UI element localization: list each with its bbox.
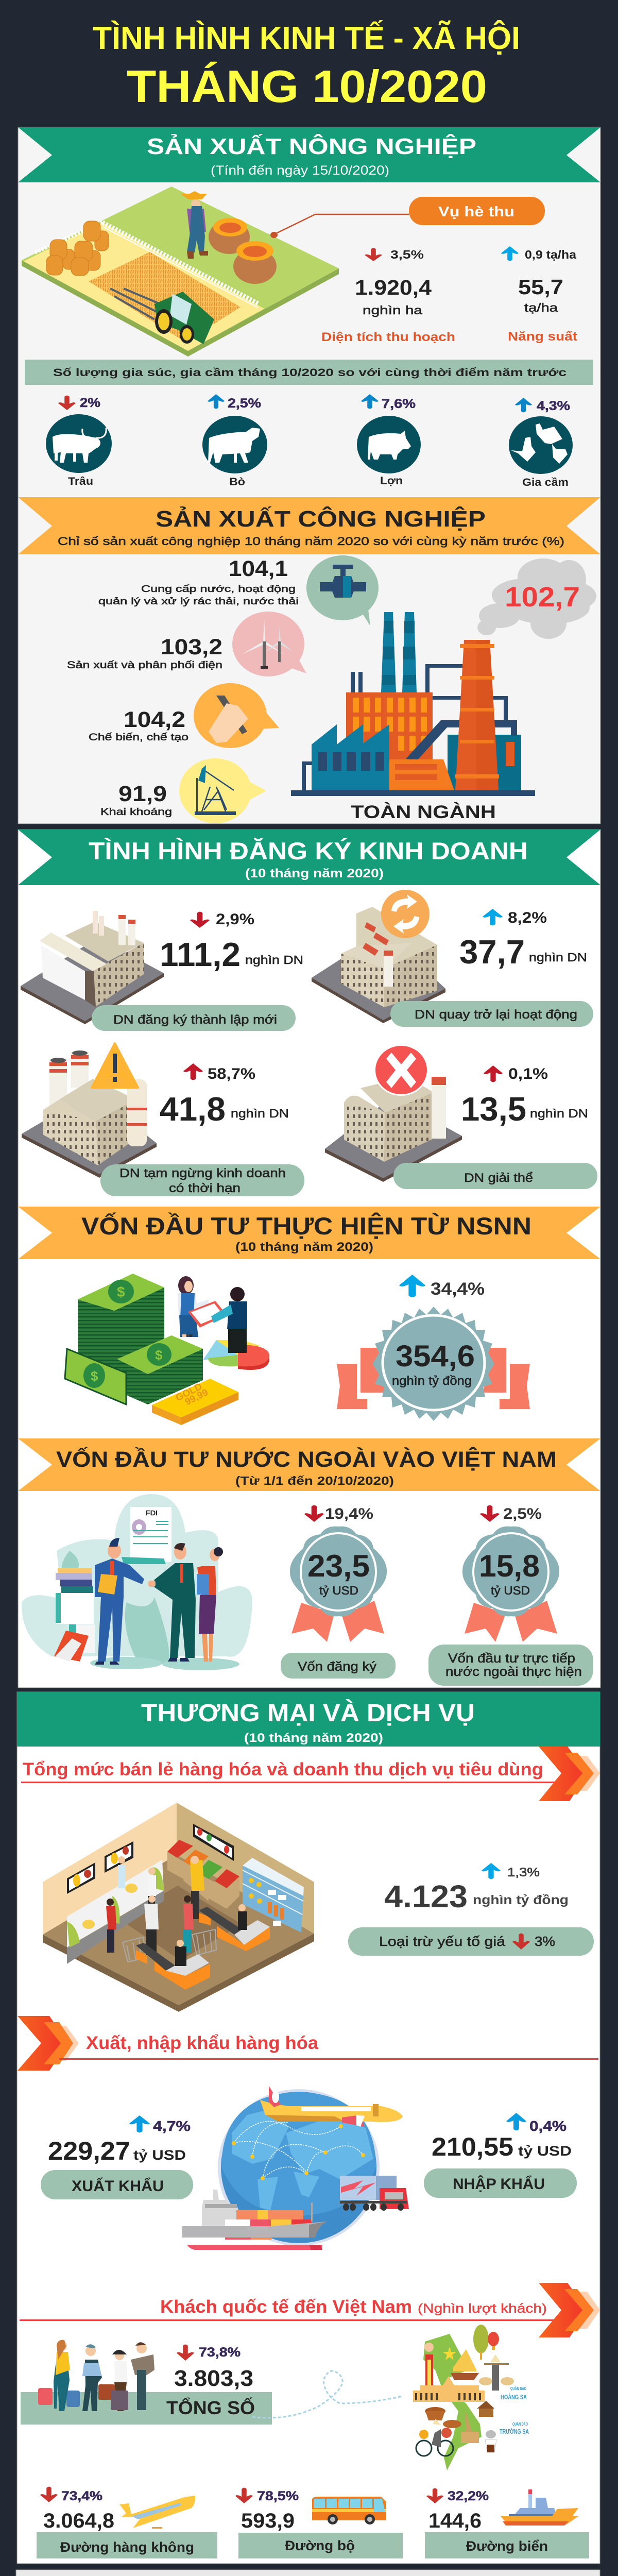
stat: exports: 4,7%	[153, 2118, 191, 2134]
stat: total visitors with travellers: TỔNG SỐ	[166, 2396, 255, 2418]
illustration: money stacks and gold bar: $	[155, 1347, 163, 1363]
stat: retail total: nghìn tỷ đồng	[473, 1893, 569, 1907]
stat: visitors by air: 3.064,8	[43, 2510, 114, 2532]
industry item: electricity: Sản xuất và phân phối điện	[67, 660, 222, 671]
stat: yield: tạ/ha	[524, 301, 558, 314]
livestock: buffalo: Trâu	[68, 476, 93, 487]
stat: registered capital: 23,5	[307, 1549, 370, 1583]
illustration: farm field with tractor	[22, 187, 339, 357]
industry item: water supply: quản lý và xử lý rác thải, nước thải	[98, 596, 299, 606]
industry item: electricity	[67, 612, 306, 676]
business card: dissolved: nghìn DN	[530, 1107, 588, 1120]
business card: newly registered: 2,9%	[216, 911, 254, 928]
heading: business registration ribbon: (10 tháng năm 2020)	[245, 867, 384, 880]
stat: retail total	[348, 1863, 594, 1956]
livestock banner	[25, 360, 593, 385]
heading: industry ribbon: Chỉ số sản xuất công nghiệp 10 tháng năm 2020 so với cùng kỳ năm trước (%)	[58, 535, 564, 548]
heading: industry ribbon	[18, 497, 600, 554]
business card: newly registered: 111,2	[160, 936, 241, 973]
livestock: pigs: 7,6%	[382, 397, 416, 411]
stat: implemented FDI	[428, 1505, 593, 1686]
business card: dissolved	[325, 1044, 597, 1189]
heading: FDI ribbon	[18, 1438, 600, 1491]
callout: summer-autumn crop label: Vụ hè thu	[438, 204, 514, 219]
stat: harvested area	[321, 248, 455, 344]
connector: dashed path to map	[252, 2371, 402, 2418]
heading: state budget investment ribbon: (10 tháng năm 2020)	[235, 1240, 373, 1254]
business card: returned to operation: DN quay trở lại hoạt động	[415, 1008, 577, 1022]
stat: registered capital: tỷ USD	[319, 1584, 358, 1597]
stat: visitors by road: Đường bộ	[285, 2538, 355, 2553]
stat: visitors by road: 593,9	[241, 2510, 295, 2532]
subheading: retail sales: Tổng mức bán lẻ hàng hóa và doanh thu dịch vụ tiêu dùng	[23, 1759, 543, 1780]
heading: state budget investment ribbon	[18, 1207, 600, 1259]
stat: registered capital	[281, 1505, 396, 1679]
illustration: supermarket	[43, 1803, 314, 2012]
stat: total visitors with travellers: 3.803,3	[174, 2366, 253, 2391]
illustration: money stacks and gold bar: 99,99	[183, 1387, 210, 1408]
business card: newly registered: nghìn DN	[245, 953, 303, 967]
livestock banner: Số lượng gia súc, gia cầm tháng 10/2020 so với cùng thời điểm năm trước	[53, 367, 566, 379]
stat: yield: Năng suất	[508, 330, 577, 344]
panel: business and investment	[18, 829, 600, 1688]
heading: state budget investment ribbon: VỐN ĐẦU TƯ THỰC HIỆN TỪ NSNN	[81, 1212, 531, 1240]
stat: exports: tỷ USD	[133, 2147, 186, 2163]
livestock: buffalo: 2%	[80, 396, 100, 410]
stat: total visitors with travellers	[21, 2340, 272, 2425]
stat: harvested area: 1.920,4	[355, 276, 432, 299]
business card: returned to operation: 8,2%	[508, 909, 547, 926]
illustration: Vietnam map and culture: QUẦN ĐẢO	[512, 2421, 528, 2427]
business card: temporarily suspended: có thời hạn	[169, 1181, 241, 1195]
business card: returned to operation: nghìn DN	[529, 951, 587, 964]
heading: trade and services band: (10 tháng năm 2020)	[244, 1731, 383, 1745]
heading: agriculture ribbon: SẢN XUẤT NÔNG NGHIỆP	[147, 133, 476, 159]
stat: imports: tỷ USD	[518, 2143, 572, 2159]
stat: yield	[501, 246, 577, 344]
illustration: money stacks and gold bar	[65, 1274, 238, 1425]
illustration: money stacks and gold bar: $	[117, 1284, 125, 1300]
livestock: cattle: Bò	[229, 476, 245, 488]
stat: imports	[424, 2113, 577, 2198]
illustration: money stacks and gold bar: $	[91, 1368, 98, 1384]
illustration: money stacks and gold bar: GOLD	[174, 1381, 204, 1403]
stat: exports: XUẤT KHẨU	[72, 2177, 164, 2195]
industry item: water supply: 104,1	[229, 556, 288, 581]
heading: trade and services band: THƯƠNG MẠI VÀ DỊCH VỤ	[141, 1699, 475, 1727]
stat: visitors by sea: 144,6	[428, 2510, 482, 2532]
heading: FDI ribbon: (Từ 1/1 đến 20/10/2020)	[235, 1474, 394, 1487]
business card: dissolved: DN giải thể	[464, 1171, 533, 1185]
stat: state budget capital badge: 34,4%	[431, 1279, 485, 1299]
stat: registered capital: 19,4%	[325, 1505, 373, 1522]
industry item: electricity: 103,2	[161, 635, 222, 659]
stat: state budget capital badge: nghìn tỷ đồng	[392, 1374, 472, 1388]
subheading: import export: Xuất, nhập khẩu hàng hóa	[86, 2033, 319, 2053]
stat: visitors by sea: Đường biển	[466, 2538, 548, 2554]
livestock: poultry: Gia cầm	[522, 477, 569, 488]
livestock: cattle	[202, 394, 267, 488]
heading: industry ribbon: SẢN XUẤT CÔNG NGHIỆP	[156, 505, 486, 532]
industry item: water supply: Cung cấp nước, hoạt động	[141, 584, 296, 594]
stat: visitors by sea	[425, 2488, 589, 2558]
stat: harvested area: Diện tích thu hoạch	[321, 330, 455, 344]
industry item: mining: 91,9	[118, 782, 167, 806]
stat: visitors by air: Đường hàng không	[60, 2539, 194, 2555]
industry item: manufacturing	[89, 683, 279, 748]
heading: trade and services band	[17, 1692, 600, 1747]
title	[93, 21, 520, 112]
stat: implemented FDI: 2,5%	[503, 1505, 542, 1522]
illustration: globe with plane ship and truck	[182, 2086, 409, 2250]
stat: visitors by air: 73,4%	[61, 2489, 102, 2503]
business card: newly registered: DN đăng ký thành lập mới	[113, 1013, 277, 1027]
heading: business registration ribbon: TÌNH HÌNH ĐĂNG KÝ KINH DOANH	[89, 837, 528, 865]
stat: imports: 210,55	[432, 2132, 513, 2161]
livestock: poultry	[509, 398, 573, 488]
illustration: business people with pie chart	[178, 1276, 269, 1370]
stat: visitors by road: 78,5%	[257, 2489, 299, 2503]
industry item: mining: Khai khoáng	[100, 807, 172, 818]
stat: whole industry	[351, 582, 580, 822]
stat: imports: NHẬP KHẨU	[453, 2175, 545, 2193]
stat: implemented FDI: nước ngoài thực hiện	[445, 1665, 582, 1679]
stat: retail total: 4.123	[384, 1879, 468, 1914]
illustration: Vietnam map and culture: HOÀNG SA	[501, 2393, 527, 2401]
livestock: pigs	[357, 394, 421, 487]
stat: visitors by air	[37, 2487, 217, 2558]
stat: implemented FDI: Vốn đầu tư trực tiếp	[448, 1651, 575, 1666]
title: THÁNG 10/2020	[127, 61, 487, 112]
business card: returned to operation	[312, 890, 593, 1027]
illustration: FDI handshake	[22, 1494, 252, 1670]
business card: dissolved: 0,1%	[508, 1065, 548, 1082]
subheading: retail sales	[21, 1747, 600, 1801]
stat: implemented FDI: 15,8	[479, 1549, 540, 1583]
livestock: poultry: 4,3%	[537, 399, 570, 413]
subheading: international visitors	[20, 2283, 600, 2337]
subheading: import export	[18, 2016, 598, 2071]
heading: agriculture ribbon: (Tính đến ngày 15/10/2020)	[211, 163, 389, 178]
business card: temporarily suspended: nghìn DN	[231, 1107, 289, 1120]
stat: exports: 229,27	[48, 2137, 130, 2165]
illustration: Vietnam map and culture: TRƯỜNG SA	[500, 2428, 529, 2435]
industry item: mining	[100, 758, 266, 823]
livestock: cattle: 2,5%	[228, 396, 261, 411]
stat: harvested area: nghìn ha	[363, 303, 422, 317]
callout: summer-autumn crop label	[270, 197, 545, 238]
stat: exports	[41, 2115, 193, 2199]
stat: harvested area: 3,5%	[390, 248, 424, 261]
business card: temporarily suspended: DN tạm ngừng kinh doanh	[119, 1166, 286, 1180]
panel: trade and services	[17, 1692, 600, 2564]
illustration: factory with smoke	[291, 558, 596, 796]
illustration: Vietnam map and culture	[413, 2325, 529, 2470]
heading: FDI ribbon: VỐN ĐẦU TƯ NƯỚC NGOÀI VÀO VIỆT NAM	[56, 1447, 557, 1472]
stat: implemented FDI: tỷ USD	[491, 1584, 530, 1597]
title: TÌNH HÌNH KINH TẾ - XÃ HỘI	[93, 21, 520, 56]
business card: returned to operation: 37,7	[459, 933, 525, 971]
subheading: international visitors: Khách quốc tế đến Việt Nam	[160, 2297, 412, 2317]
stat: visitors by sea: 32,2%	[448, 2489, 489, 2503]
stat: state budget capital badge	[337, 1275, 530, 1421]
business card: temporarily suspended	[22, 1043, 304, 1196]
heading: agriculture ribbon	[18, 127, 600, 182]
subheading: international visitors: (Nghìn lượt khách)	[418, 2301, 547, 2316]
stat: yield: 0,9 tạ/ha	[525, 248, 576, 261]
heading: business registration ribbon	[18, 829, 600, 885]
illustration: Vietnam map and culture: QUẦN ĐẢO	[510, 2386, 526, 2391]
panel: prices and disasters	[16, 2570, 600, 2576]
stat: visitors by road	[235, 2488, 403, 2558]
stat: retail total: 3%	[535, 1934, 555, 1949]
stat: yield: 55,7	[518, 275, 563, 299]
stat: retail total: 1,3%	[507, 1866, 540, 1879]
business card: temporarily suspended: 41,8	[160, 1090, 226, 1128]
livestock: pigs: Lợn	[380, 475, 403, 487]
stat: imports: 0,4%	[529, 2118, 566, 2134]
stat: whole industry: 102,7	[505, 582, 580, 613]
business card: dissolved: 13,5	[461, 1090, 526, 1128]
stat: whole industry: TOÀN NGÀNH	[351, 802, 496, 822]
industry item: manufacturing: 104,2	[124, 707, 185, 732]
business card: newly registered	[21, 911, 303, 1031]
panel: agriculture and industry	[18, 127, 600, 824]
industry item: water supply	[98, 555, 379, 626]
industry item: manufacturing: Chế biến, chế tạo	[89, 732, 188, 743]
business card: temporarily suspended: 58,7%	[208, 1065, 255, 1082]
stat: registered capital: Vốn đăng ký	[298, 1659, 377, 1674]
stat: total visitors with travellers: 73,8%	[199, 2345, 241, 2360]
livestock: buffalo	[46, 396, 112, 487]
stat: state budget capital badge: 354,6	[396, 1340, 475, 1373]
illustration: FDI handshake: FDI	[146, 1509, 158, 1517]
stat: retail total: Loại trừ yếu tố giá	[379, 1934, 506, 1949]
